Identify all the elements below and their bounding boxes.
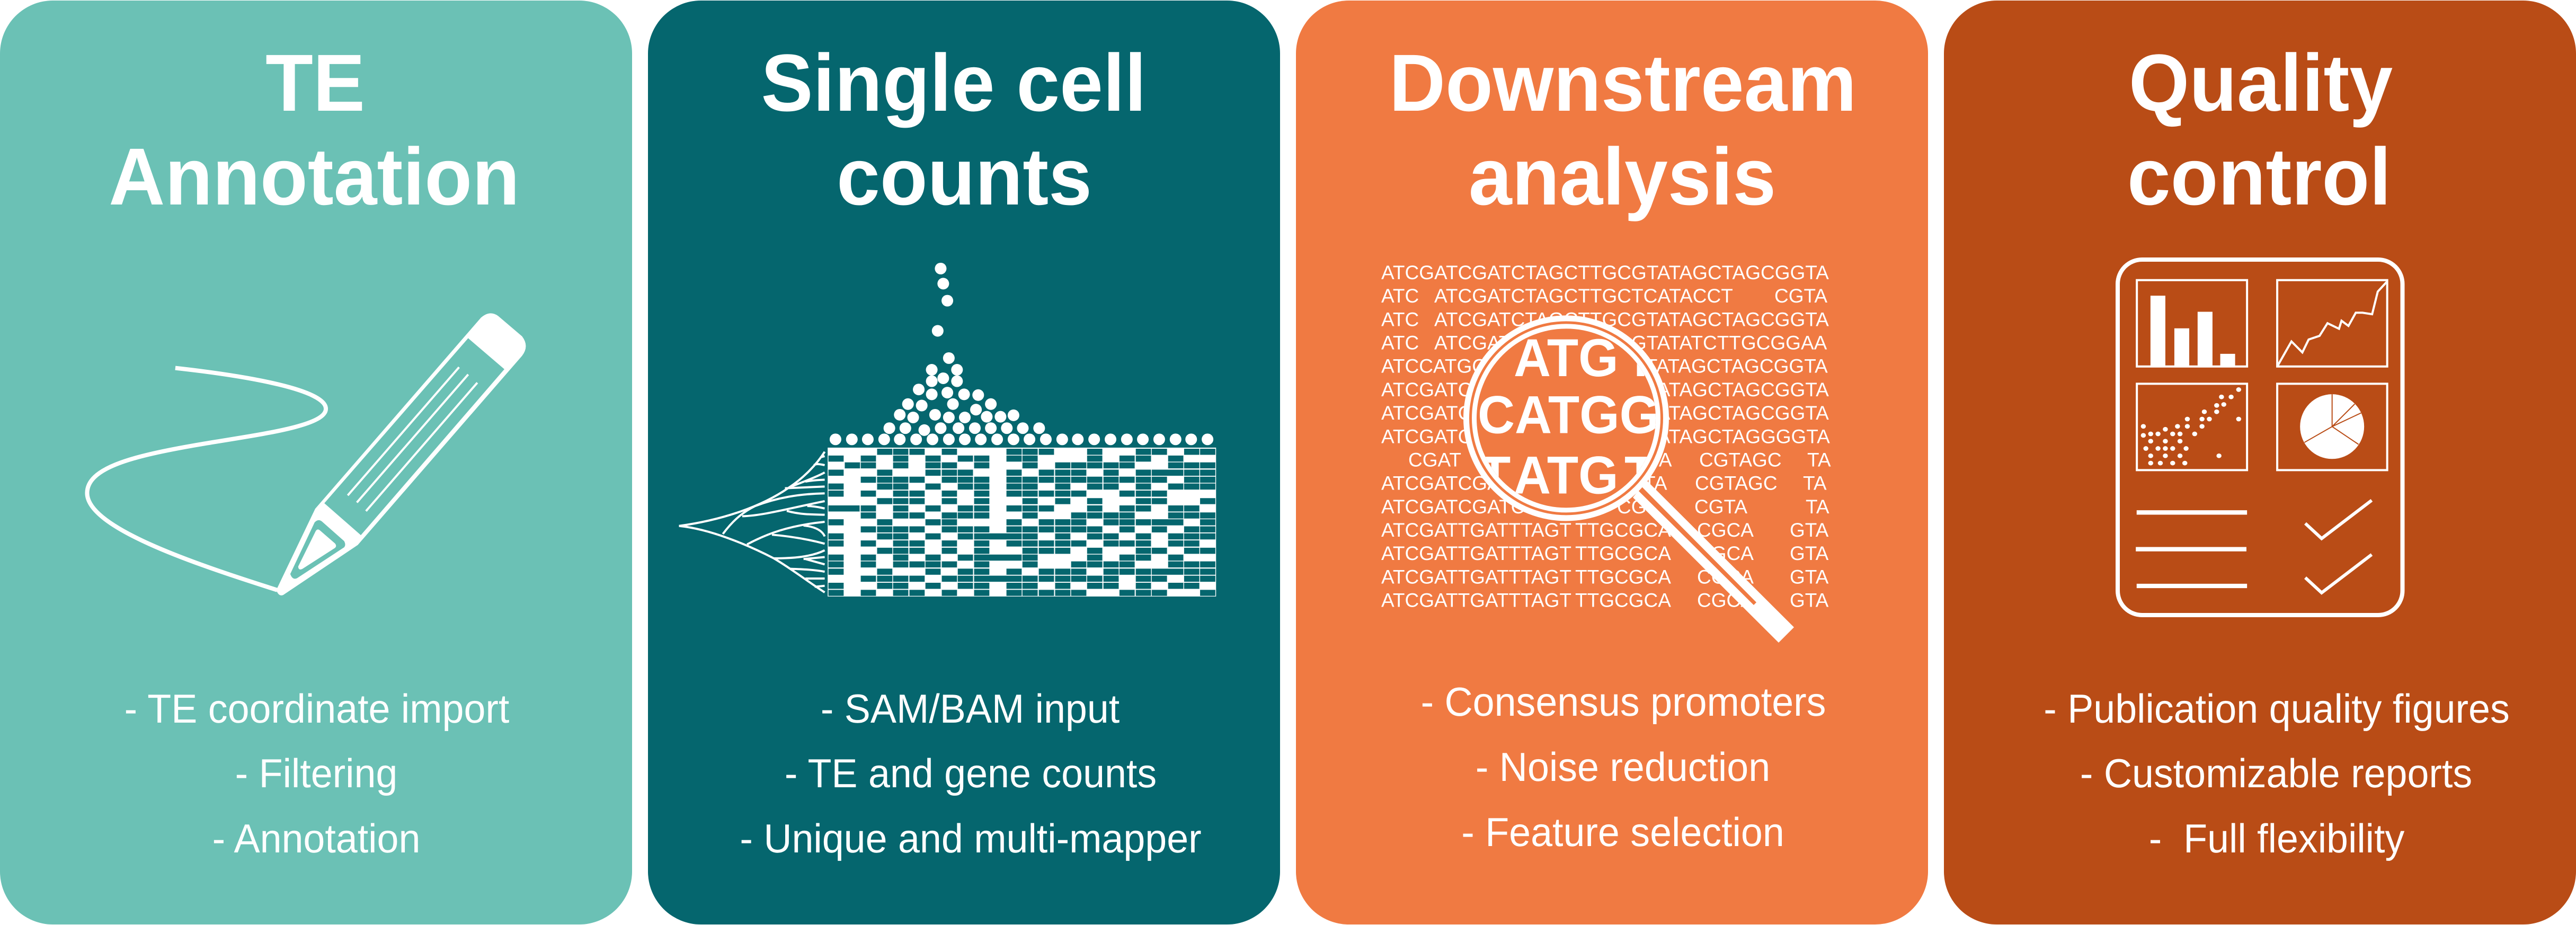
scatter plot: [2137, 384, 2247, 470]
bullet list: Downstream analysis: [1421, 679, 1826, 855]
icon: DNA sequence text block: ATCGATTGATTTAGT: [1381, 542, 1571, 564]
magnified sequence text: ATG: [1514, 327, 1619, 388]
icon: DNA sequence text block: CGTAGC: [1695, 473, 1778, 494]
icon: DNA sequence text block: TA: [1807, 449, 1831, 470]
icon: DNA sequence text block: CG: [1617, 496, 1647, 518]
bullet list: Single cell counts: - TE and gene counts: [785, 750, 1157, 796]
magnified sequence text: T: [1624, 445, 1656, 505]
icon: DNA sequence text block: TTGCGCA: [1575, 542, 1671, 564]
icon: DNA sequence text block: ATCGATCGATCTAGCTTGCGTATAGCTAGCGGTA: [1381, 262, 1829, 283]
icon: DNA sequence text block: GTA: [1790, 542, 1829, 564]
icon: DNA sequence text block: ATCGATTGATTTAGT: [1381, 589, 1571, 611]
heading: Single cell counts: Single cell: [761, 38, 1147, 128]
icon: DNA sequence text block: TTGCGCA: [1575, 566, 1671, 588]
line chart: [2277, 280, 2387, 367]
panel: Downstream analysis: [1296, 1, 1928, 924]
heading: Quality control: control: [2127, 132, 2391, 222]
icon: DNA sequence text block: ATCCATGCATCTAGCTTGCGTATAGCTAGCGGTA: [1381, 355, 1828, 377]
bullet list: Single cell counts: - Unique and multi-mapper: [740, 815, 1202, 861]
icon: DNA sequence text block: TA: [1803, 473, 1827, 494]
magnifier lens: [1467, 318, 1666, 518]
heading: TE Annotation: TE: [265, 38, 365, 128]
heading: Single cell counts: [761, 38, 1147, 222]
magnified sequence text: ATG: [1514, 445, 1619, 505]
bullet list: Downstream analysis: - Consensus promoters: [1421, 679, 1826, 725]
icon: DNA sequence text block: GTA: [1790, 519, 1829, 541]
pencil: [276, 313, 526, 595]
bullet list: TE Annotation: - Annotation: [212, 815, 420, 861]
bullet list: Quality control: - Publication quality figures: [2044, 686, 2510, 732]
bullet list: TE Annotation: - TE coordinate import: [125, 686, 509, 732]
icon: DNA sequence text block: GTA: [1790, 589, 1829, 611]
icon: DNA sequence text block: ATCGATCTAGCTTGCTCATACCT: [1434, 285, 1733, 307]
bullet list: Single cell counts: [740, 686, 1202, 861]
heading: Downstream analysis: Downstream: [1389, 38, 1857, 128]
icon: DNA sequence text block: TA: [1648, 449, 1672, 470]
bullet list: Downstream analysis: - Noise reduction: [1476, 744, 1770, 790]
icon: DNA sequence text block: CGAT: [1408, 449, 1461, 470]
heading: TE Annotation: [109, 38, 520, 222]
bullet list: Quality control: - Full flexibility: [2149, 815, 2404, 861]
check mark 1: [2305, 500, 2371, 538]
icon: DNA sequence text block: CGTAGC: [1699, 449, 1782, 470]
icon: DNA sequence text block: GTA: [1790, 566, 1829, 588]
icon: DNA sequence text block: ATC: [1381, 332, 1419, 354]
panel: Single cell counts: [648, 1, 1280, 924]
icon: DNA sequence text block: ATCGATCGATCTAGCTTGCGTATAGCTAGCGGTA: [1381, 402, 1829, 424]
bullet list: Quality control: [2044, 686, 2510, 861]
icon: DNA sequence text block: CGCA: [1697, 566, 1754, 588]
icon: DNA sequence text block: ATCGATTGATTTAGT: [1381, 566, 1571, 588]
icon: DNA sequence text block: TTGCGCA: [1575, 519, 1671, 541]
icon: DNA sequence text block: [1381, 262, 1831, 611]
magnified sequence text: T: [1625, 327, 1656, 388]
panel: Quality control: [1944, 1, 2576, 924]
icon: DNA sequence text block: ATC: [1381, 285, 1419, 307]
bullet list: Quality control: - Customizable reports: [2080, 750, 2472, 796]
icon: DNA sequence text block: ATCGATCGATCTAGCTTGCGTATAGCTAGGGGTA: [1381, 425, 1830, 447]
icon: DNA sequence text block: ATCGATCTAGCTTGCGTATAGCTAGCGGTA: [1434, 308, 1829, 330]
text lines: [2136, 510, 2247, 588]
icon: DNA sequence text block: TA: [1806, 496, 1829, 518]
heading: Quality control: Quality: [2129, 38, 2393, 128]
icon: DNA sequence text block: ATCGATCGATC: [1381, 473, 1525, 494]
icon: DNA sequence text block: ATC: [1381, 308, 1419, 330]
icon: DNA sequence text block: TA: [1644, 473, 1667, 494]
magnified sequence text: CATGG: [1478, 385, 1659, 444]
drawn curve: [87, 368, 326, 590]
bar chart: [2137, 280, 2247, 367]
panel: TE Annotation: [0, 1, 632, 924]
dendrogram: [679, 452, 825, 592]
icon: magnifying glass: [1467, 318, 1794, 643]
check mark 2: [2305, 555, 2371, 593]
falling dots: [830, 263, 1213, 445]
heatmap grid: [828, 448, 1216, 597]
magnified sequence text: T: [1479, 445, 1511, 505]
icon: DNA sequence text block: CGTA: [1774, 285, 1827, 307]
icon: DNA sequence text block: ATCGATTGATTTAGT: [1381, 519, 1571, 541]
heading: Quality control: [2127, 38, 2393, 222]
icon: DNA sequence text block: CGCA: [1697, 589, 1754, 611]
bullet list: TE Annotation: [125, 686, 509, 861]
icon: DNA sequence text block: CGCA: [1697, 519, 1754, 541]
icon: DNA sequence text block: CGCA: [1697, 542, 1754, 564]
heading: Single cell counts: counts: [837, 132, 1092, 222]
icon: report page with charts: [2118, 260, 2402, 615]
icon: DNA sequence text block: ATCGATCTAGCTTGCGTATATCTTGCGGAA: [1434, 332, 1827, 354]
pie chart: [2277, 384, 2387, 470]
bullet list: Downstream analysis: - Feature selection: [1461, 809, 1784, 855]
icon: pencil drawing a curve: [87, 313, 526, 595]
icon: DNA sequence text block: CGTA: [1694, 496, 1747, 518]
icon: DNA sequence text block: TTGCGCA: [1575, 589, 1671, 611]
heading: TE Annotation: Annotation: [109, 132, 520, 222]
heading: Downstream analysis: analysis: [1469, 132, 1776, 222]
bullet list: TE Annotation: - Filtering: [235, 750, 397, 796]
icon: DNA sequence text block: ATCGATCGATC: [1381, 496, 1525, 518]
icon: DNA sequence text block: ATCGATCGATCTAGCTTGCGTATAGCTAGCGGTA: [1381, 379, 1829, 401]
heading: Downstream analysis: [1389, 38, 1857, 222]
report frame: [2118, 260, 2402, 615]
magnified sequence text: [1479, 339, 1656, 494]
icon: single cell heatmap with dendrogram and dots: [679, 263, 1216, 597]
magnifier handle: [1633, 481, 1794, 643]
bullet list: Single cell counts: - SAM/BAM input: [821, 686, 1120, 732]
